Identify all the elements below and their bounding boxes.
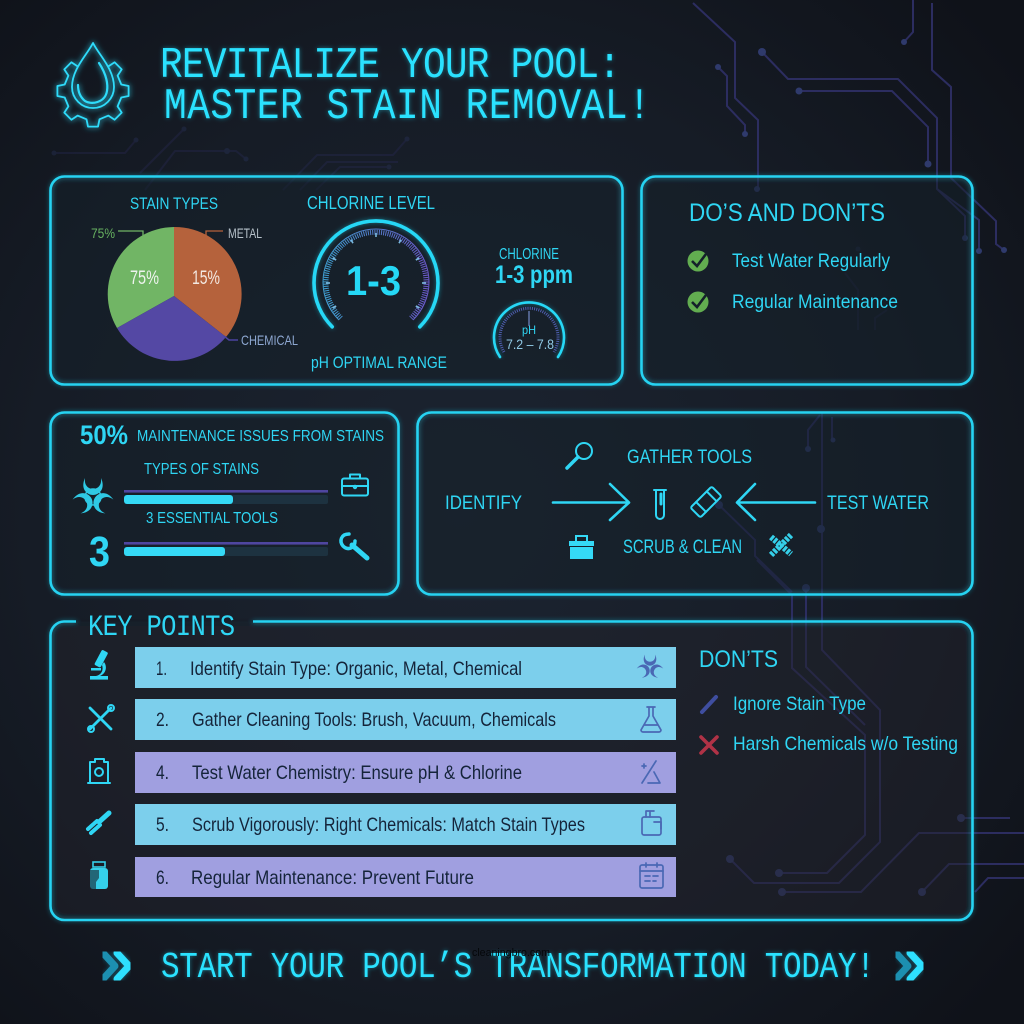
row 1: identify stain type: Identify Stain Type: Organic, Metal, Chemical [190,658,522,680]
panel: statistics [50,412,398,594]
row 2: gather cleaning tools: Gather Cleaning Tools: Brush, Vacuum, Chemicals [192,709,556,731]
progress bar: types of stains [124,490,328,504]
chlorine readout: 1-3 ppm [495,261,573,289]
row 4: scrub vigorously [88,804,676,845]
chlorine readout [495,246,573,289]
pie label: chemical: CHEMICAL [241,332,298,348]
label: test water: TEST WATER [827,492,929,514]
row 3: test water chemistry [88,752,676,793]
caption: pH optimal range: pH OPTIMAL RANGE [311,353,447,372]
row 5: regular maintenance: 6. [156,867,169,889]
pie label: 75% [91,225,143,241]
stat: 3: 3 [89,528,110,576]
progress bar: essential tools [124,542,328,556]
chlorine readout: CHLORINE [499,246,559,263]
small gauge: pH [494,302,564,357]
heading: key points: KEY POINTS [88,611,235,645]
arrow: test water to centre [737,484,815,520]
row 2: gather cleaning tools: 2. [156,709,169,731]
small gauge: pH: 7.2 – 7.8 [506,336,554,352]
pie label: metal: METAL [228,225,262,241]
icon: wrench [341,534,367,558]
pie label: metal [206,225,262,241]
pie label: chemical [224,332,298,348]
icon: scrub brushes [771,535,791,555]
heading: don'ts: DON’TS [699,646,778,673]
icon: test strip [690,486,722,518]
don't item: harsh chemicals: Harsh Chemicals w/o Testing [733,733,958,755]
label: identify: IDENTIFY [445,492,522,514]
icon: magnifier [567,443,592,468]
icon: briefcase [342,474,368,496]
icon: biohazard [72,478,114,515]
do item: test water regularly: Test Water Regularly [732,250,890,272]
don't item: ignore stain type: Ignore Stain Type [733,693,866,715]
title [160,42,651,132]
stat: 50% maintenance issues: MAINTENANCE ISSUES FROM STAINS [137,428,384,445]
row 2: gather cleaning tools [88,699,676,740]
row 4: scrub vigorously: Scrub Vigorously: Right Chemicals: Match Stain Types [192,814,585,836]
icon: toolbox [569,536,594,559]
pie label: 75%: 75% [91,225,115,241]
row 4: scrub vigorously: 5. [156,814,169,836]
panel: key points [50,611,972,920]
heading: stain types: STAIN TYPES [130,195,218,213]
heading: do's and don'ts: DO’S AND DON’TS [689,199,885,227]
stat: 50% maintenance issues [80,420,384,450]
title: REVITALIZE YOUR POOL: [160,42,621,91]
panel: process flow [418,412,972,594]
stat: 50% maintenance issues: 50% [80,420,128,450]
label: 3 essential tools: 3 ESSENTIAL TOOLS [146,510,278,527]
row 1: identify stain type [90,647,676,688]
label: scrub and clean: SCRUB & CLEAN [623,537,742,558]
logo: water drop in gear [57,43,129,127]
call to action: START YOUR POOL’S TRANSFORMATION TODAY! [161,948,875,989]
right chevrons [897,953,922,979]
panel: do's and don'ts [642,176,972,384]
row 5: regular maintenance: Regular Maintenance: Prevent Future [191,867,474,889]
row 1: identify stain type: 1. [156,658,167,680]
pie chart: stain types: 75% [130,268,159,289]
panel: stain types and gauges [50,176,622,384]
row 5: regular maintenance [90,857,676,897]
icon: test tube [654,490,666,519]
title: MASTER STAIN REMOVAL! [164,83,651,132]
watermark: cleaningbro.com [472,947,550,959]
label: types of stains: TYPES OF STAINS [144,461,259,478]
do item: regular maintenance: Regular Maintenance [732,291,898,313]
large gauge: chlorine 1-3 [314,221,438,327]
pie chart: stain types: 15% [192,268,220,289]
arrow: identify to centre [553,484,629,520]
row 3: test water chemistry: Test Water Chemistry: Ensure pH & Chlorine [192,762,522,784]
heading: chlorine level: CHLORINE LEVEL [307,193,435,213]
small gauge: pH: pH [522,323,536,337]
left chevrons [104,953,129,979]
pie chart: stain types [108,227,242,361]
label: gather tools: GATHER TOOLS [627,447,752,468]
large gauge: chlorine 1-3: 1-3 [346,257,401,304]
row 3: test water chemistry: 4. [156,762,169,784]
